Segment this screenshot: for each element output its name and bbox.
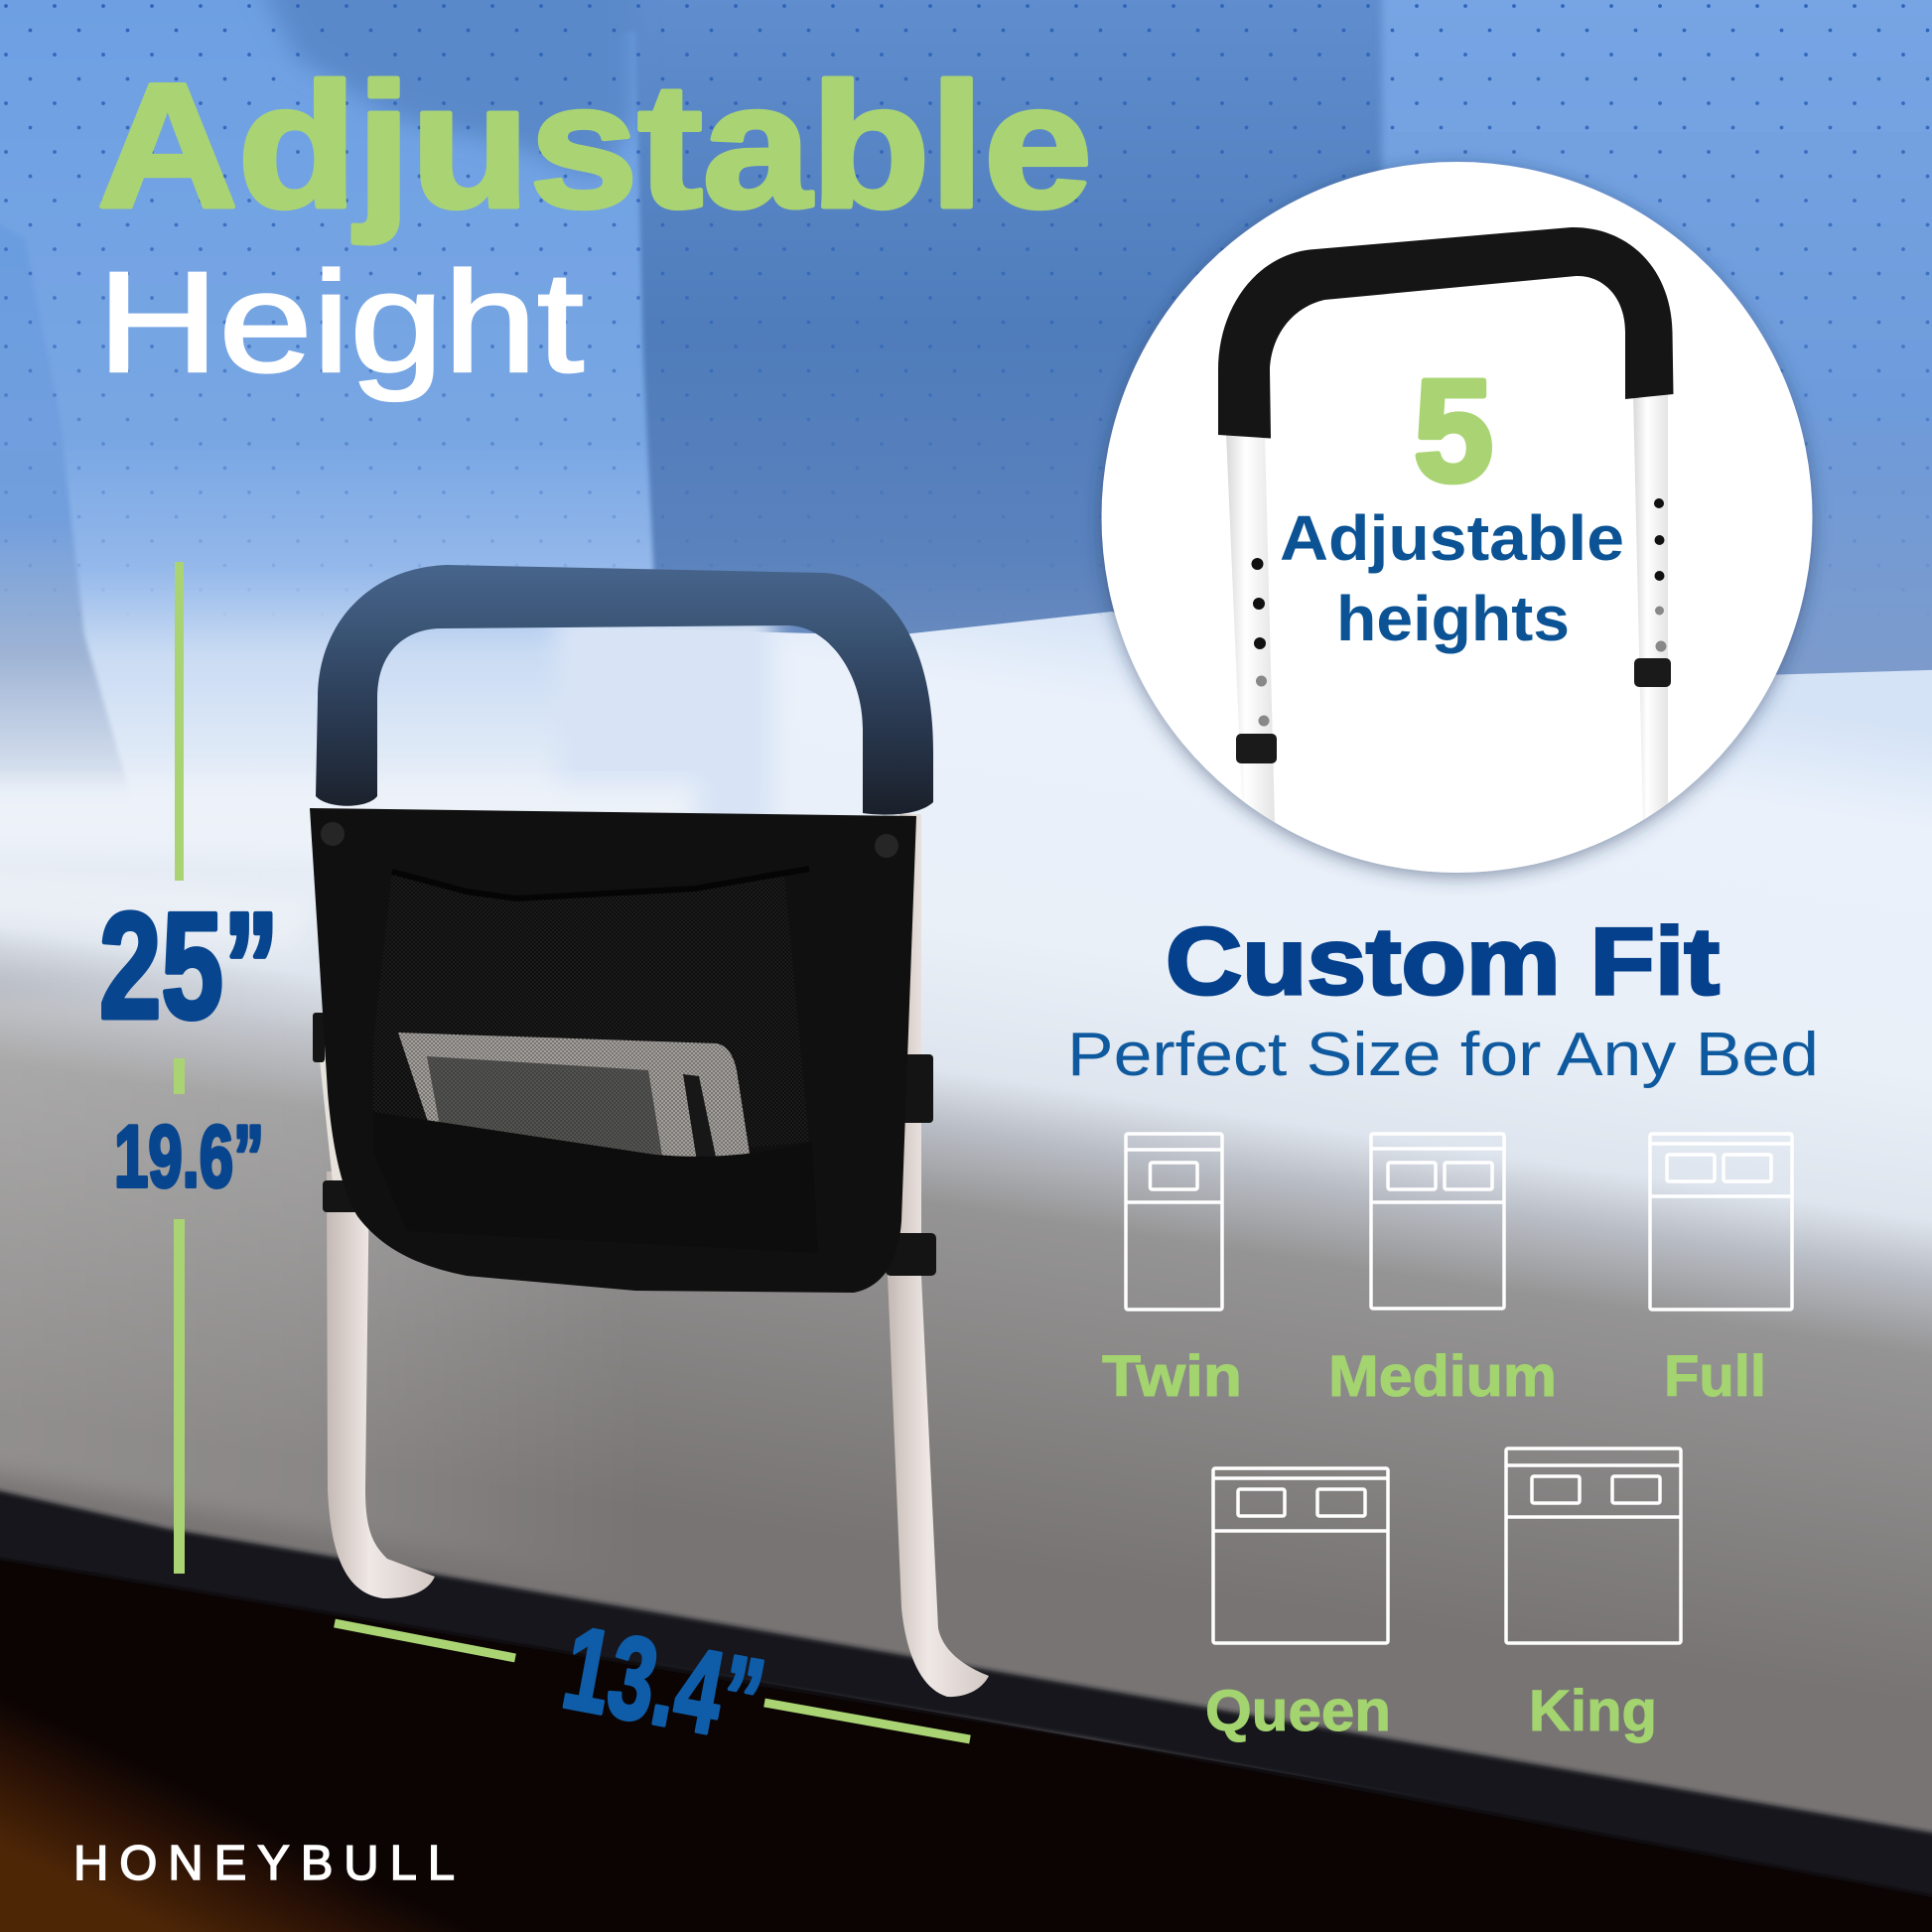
tablet xyxy=(398,1033,752,1167)
heading: Height: Height xyxy=(97,242,584,402)
height dimension lines xyxy=(174,562,185,1574)
grab handle xyxy=(316,565,933,815)
dimension: 13.4 inches: 13.4” xyxy=(554,1602,773,1767)
mesh pocket xyxy=(373,874,809,1157)
title xyxy=(97,47,1092,402)
bed size icons xyxy=(1126,1134,1792,1643)
circle callout: 5 adjustable heights xyxy=(1102,162,1813,873)
icon: king bed xyxy=(1506,1449,1681,1643)
right leg xyxy=(888,814,989,1697)
icon: twin bed xyxy=(1126,1134,1222,1310)
left leg xyxy=(327,1172,435,1598)
icon: medium bed xyxy=(1371,1134,1504,1309)
bed size labels: Queen xyxy=(1205,1679,1391,1743)
text: heights: heights xyxy=(1336,583,1570,654)
left pole sliver xyxy=(320,1052,357,1191)
close-up rail xyxy=(1218,227,1674,824)
brand logo: HONEYBULL xyxy=(73,1837,455,1890)
storage pocket xyxy=(310,808,916,1293)
bed size labels: King xyxy=(1529,1679,1657,1743)
straps xyxy=(313,1013,936,1276)
numeral 5: 5 xyxy=(1414,349,1493,511)
bed size labels: Medium xyxy=(1328,1344,1557,1409)
bed size labels xyxy=(1102,1344,1766,1743)
snap buttons xyxy=(321,822,345,846)
icon: full bed xyxy=(1650,1134,1792,1310)
dimension: 19.6 inches: 19.6” xyxy=(114,1107,264,1205)
width dimension lines xyxy=(335,1623,970,1739)
heading: Custom Fit: Custom Fit xyxy=(1166,908,1720,1015)
subheading: Perfect Size for Any Bed xyxy=(1067,1021,1819,1089)
dimension: 25 inches: 25” xyxy=(99,882,279,1050)
product: bed rail with storage pocket xyxy=(310,565,989,1697)
bed size labels: Full xyxy=(1664,1344,1766,1409)
text: Adjustable: Adjustable xyxy=(1280,502,1624,574)
bed size labels: Twin xyxy=(1102,1344,1242,1409)
front pocket xyxy=(373,1112,818,1253)
heading: Adjustable: Adjustable xyxy=(97,47,1092,244)
icon: queen bed xyxy=(1213,1468,1388,1643)
